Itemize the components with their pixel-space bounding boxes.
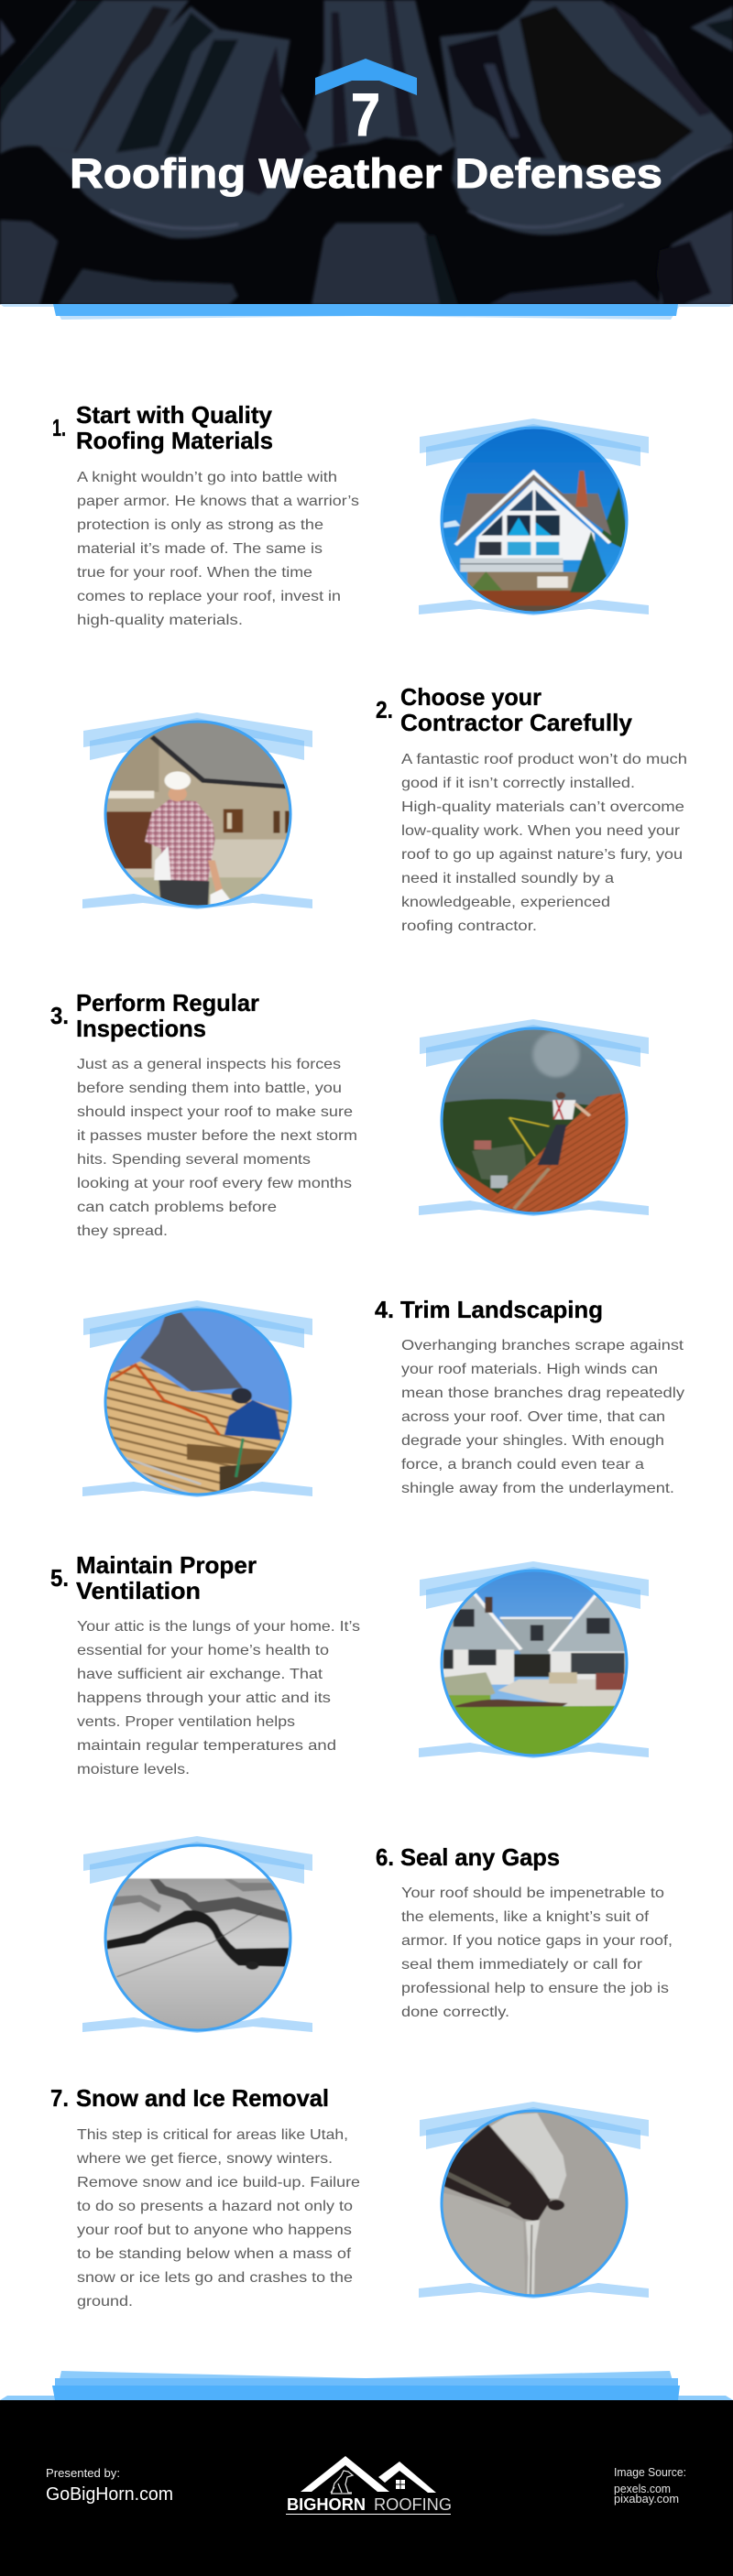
section 5 heading: Ventilation (76, 1577, 201, 1604)
section 6 body text: done correctly. (401, 2005, 509, 2020)
section 3 heading: 3. (50, 1002, 69, 1029)
main title: Roofing Weather Defenses (70, 150, 662, 197)
section 4 body text: mean those branches drag repeatedly (401, 1386, 684, 1401)
section 7 heading: Snow and Ice Removal (76, 2084, 329, 2112)
section 4 body text: degrade your shingles. With enough (401, 1433, 664, 1449)
section 1 (52, 401, 649, 628)
section 5 roof frame (419, 1561, 649, 1758)
section 3 body text: before sending them into battle, you (77, 1081, 342, 1096)
section 1 photo: modern house with blue sky (434, 423, 630, 621)
section 6 (82, 1836, 673, 2037)
section 3 body text: looking at your roof every few months (77, 1176, 352, 1191)
section 5 heading (50, 1551, 257, 1604)
section 5 heading: Maintain Proper (76, 1551, 257, 1579)
section 2 heading: Contractor Carefully (400, 709, 633, 736)
section 5 (50, 1551, 649, 1777)
section 7 body text: where we get fierce, snowy winters. (76, 2151, 333, 2167)
section 4 heading: 4. (375, 1296, 394, 1323)
section 7 photo: icicle on roof edge (440, 2110, 629, 2297)
section 4 photo: worker on timber battens (104, 1308, 291, 1496)
section 3 heading: Perform Regular (76, 989, 259, 1016)
section 7 body text: Remove snow and ice build-up. Failure (77, 2175, 360, 2190)
image source (614, 2465, 686, 2505)
section 3 heading: Inspections (76, 1015, 206, 1042)
section 2 body text: good if it isn’t correctly installed. (401, 776, 635, 791)
logo roofs icon (301, 2456, 436, 2494)
section 2 body text: low-quality work. When you need your (401, 823, 681, 839)
section 4 body text (401, 1338, 684, 1496)
section 4 body text: your roof materials. High winds can (401, 1362, 658, 1377)
section 1 heading: Roofing Materials (76, 427, 273, 454)
section 1 body text: paper armor. He knows that a warrior’s (77, 494, 359, 509)
section 6 body text (401, 1886, 673, 2020)
section 2 body text: roof to go up against nature’s fury, you (401, 847, 683, 863)
section 2 heading: Choose your (400, 683, 542, 711)
section 1 body text: material it’s made of. The same is (77, 541, 323, 557)
section 7 body text: to do so presents a hazard not only to (77, 2199, 353, 2214)
section 5 body text: have sufficient air exchange. That (77, 1667, 323, 1682)
section 3 body text: can catch problems before (77, 1200, 277, 1215)
section 4 body text: shingle away from the underlayment. (401, 1481, 674, 1496)
section 5 body text: happens through your attic and its (77, 1690, 331, 1706)
section 2 photo: contractor in hard hat (104, 720, 291, 908)
section 1 heading: Start with Quality (76, 401, 273, 429)
section 7 body text: ground. (77, 2294, 133, 2310)
section 6 body text: seal them immediately or call for (401, 1957, 643, 1973)
section 2 heading (376, 683, 633, 736)
section 2 body text: need it installed soundly by a (401, 871, 614, 886)
section 1 body text (77, 470, 359, 628)
presented by: GoBigHorn.com (46, 2484, 173, 2505)
section 3 body text: hits. Spending several moments (77, 1152, 311, 1168)
section 1 body text: comes to replace your roof, invest in (77, 589, 341, 604)
header photo: dark roof tiles (0, 0, 733, 305)
section 5 body text: vents. Proper ventilation helps (77, 1714, 295, 1730)
section 5 body text: moisture levels. (77, 1762, 190, 1777)
section 6 body text: Your roof should be impenetrable to (401, 1886, 664, 1901)
section 2 body text: High-quality materials can’t overcome (401, 799, 684, 815)
section 2 body text: A fantastic roof product won’t do much (401, 752, 687, 767)
section 5 body text: essential for your home’s health to (77, 1643, 329, 1658)
section 1 heading (52, 401, 273, 454)
section 2 heading: 2. (376, 696, 393, 723)
section 1 body text: A knight wouldn’t go into battle with (77, 470, 337, 485)
section 5 body text (77, 1619, 360, 1777)
image source: pixabay.com (614, 2492, 679, 2505)
logo: Bighorn Roofing (286, 2456, 452, 2515)
section 6 roof frame (82, 1836, 312, 2033)
section 3 body text (77, 1057, 357, 1239)
header banner (0, 0, 733, 320)
section 2 body text: knowledgeable, experienced (401, 895, 610, 910)
image source: pexels.com (614, 2482, 671, 2495)
section 7 body text: snow or ice lets go and crashes to the (77, 2270, 353, 2286)
section 2 roof frame (82, 712, 312, 909)
section 2 body text: roofing contractor. (401, 918, 537, 934)
section 7 body text: to be standing below when a mass of (77, 2246, 352, 2262)
section 3 (50, 989, 649, 1239)
section 5 photo: white house with green lawn (440, 1570, 629, 1756)
section 4 roof frame (82, 1300, 312, 1497)
section 1 body text: true for your roof. When the time (77, 565, 312, 581)
section 5 body text: maintain regular temperatures and (77, 1738, 336, 1754)
logo: Bighorn Roofing: BIGHORN (287, 2495, 366, 2514)
title number: 7 (351, 81, 380, 148)
section 1 heading: 1. (52, 414, 66, 441)
header blue strip (0, 304, 733, 320)
section 3 body text: they spread. (77, 1223, 168, 1239)
section 3 body text: should inspect your roof to make sure (77, 1104, 353, 1120)
presented by: Presented by: (46, 2466, 120, 2480)
section 4 (82, 1296, 684, 1502)
footer panel (0, 2400, 733, 2576)
section 6 body text: the elements, like a knight’s suit of (401, 1909, 650, 1925)
section 7 roof frame (419, 2102, 649, 2299)
section 2 body text (401, 752, 687, 934)
section 2 (82, 683, 687, 934)
section 3 body text: Just as a general inspects his forces (77, 1057, 341, 1072)
section 3 body text: it passes muster before the next storm (77, 1128, 357, 1144)
section 7 body text: This step is critical for areas like Utah, (77, 2127, 348, 2143)
section 3 roof frame (419, 1019, 649, 1216)
section 7 heading: 7. (50, 2084, 69, 2112)
section 1 roof frame (419, 418, 649, 615)
section 6 body text: professional help to ensure the job is (401, 1981, 669, 1996)
section 7 body text: your roof but to anyone who happens (77, 2223, 352, 2238)
section 7 (50, 2084, 649, 2310)
image source: Image Source: (614, 2465, 686, 2479)
footer blue roof bands (0, 2371, 733, 2400)
section 4 body text: across your roof. Over time, that can (401, 1409, 665, 1425)
section 1 body text: protection is only as strong as the (77, 517, 323, 533)
section 6 heading: Seal any Gaps (400, 1843, 560, 1871)
section 4 heading: Trim Landscaping (400, 1296, 603, 1323)
section 3 photo: roofer on orange tile roof (434, 1021, 630, 1218)
section 4 body text: Overhanging branches scrape against (401, 1338, 684, 1353)
title chevron icon (315, 59, 417, 95)
section 5 heading: 5. (50, 1564, 69, 1592)
section 7 body text (76, 2127, 360, 2310)
section 1 body text: high-quality materials. (77, 613, 243, 628)
section 4 body text: force, a branch could even tear a (401, 1457, 644, 1473)
section 5 body text: Your attic is the lungs of your home. It’s (77, 1619, 360, 1635)
logo: Bighorn Roofing: ROOFING (374, 2495, 452, 2514)
section 6 body text: armor. If you notice gaps in your roof, (401, 1933, 673, 1949)
section 6 photo: metal roof tile close-up (104, 1844, 291, 2031)
presented by (46, 2466, 173, 2505)
section 6 heading: 6. (376, 1843, 394, 1871)
section 3 heading (50, 989, 259, 1042)
